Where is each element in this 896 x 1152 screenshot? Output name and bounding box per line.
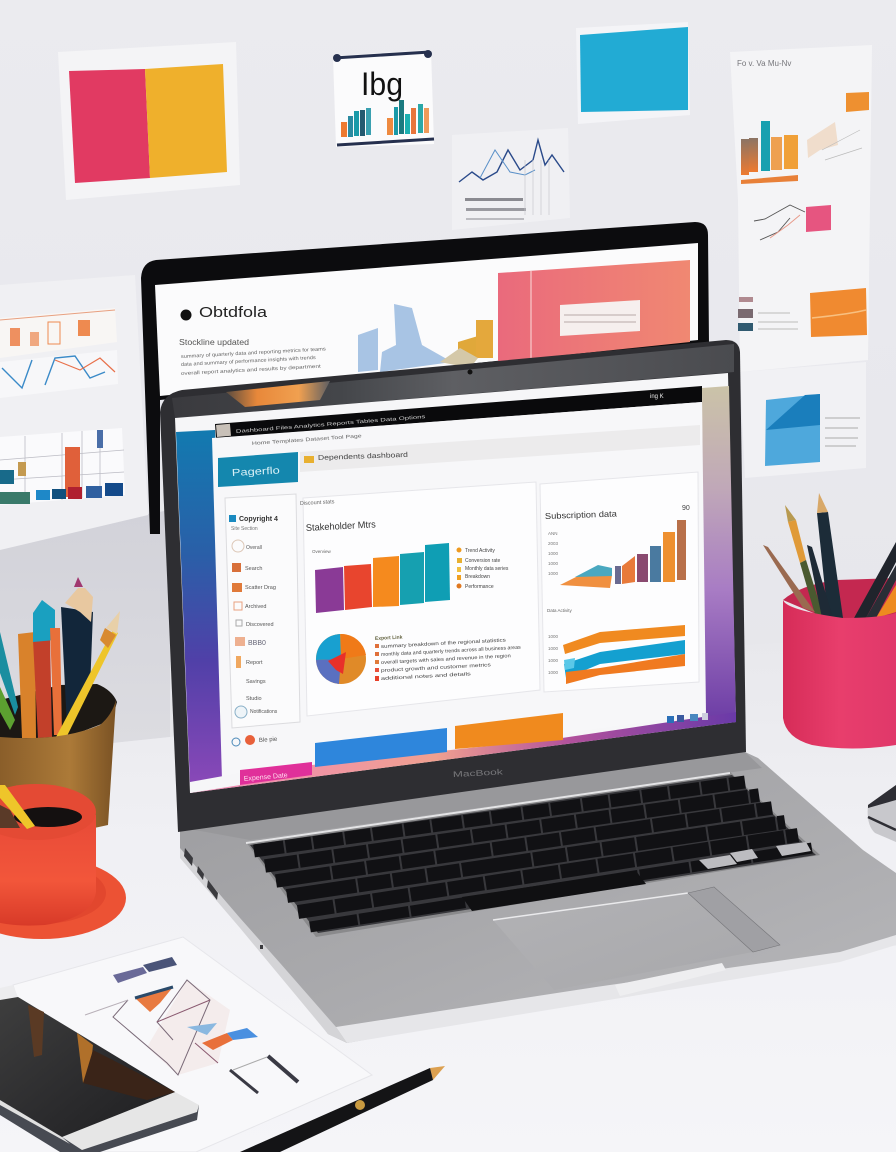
browser top bar text [216, 394, 664, 437]
sidebar [225, 494, 300, 728]
note card: small bar chart with title: Ibg [361, 66, 403, 102]
pink tab: Expense Date [244, 772, 288, 783]
sidebar: Copyright 4 [239, 516, 278, 523]
light keys [699, 842, 811, 869]
side ports [184, 848, 263, 949]
sidebar: Scatter Drag [245, 585, 276, 591]
saucer [0, 857, 126, 939]
sheet blue and orange mark [187, 1023, 258, 1050]
monitor subheading: Stockline updated [179, 338, 249, 347]
note card: small bar chart with title [333, 50, 434, 147]
area band chart: 1000 [548, 670, 559, 675]
left pencil cup [0, 577, 120, 830]
side axis labels: 1000 [548, 551, 559, 556]
browser top bar text: Dashboard Files Analytics Reports Tables Data Options [236, 414, 426, 435]
pie notes [375, 635, 521, 682]
report bar chart [741, 121, 798, 184]
poster: left wall charts [0, 275, 148, 550]
trackpad bright edge [493, 893, 688, 920]
poster: right wall report [730, 45, 872, 478]
sidebar: Search [245, 566, 262, 572]
toolbar [252, 427, 691, 447]
pie notes: monthly data and quarterly trends across all business areas [381, 645, 521, 658]
tab strip [300, 425, 700, 472]
side axis labels: 1000 [548, 561, 559, 566]
left silver side band [180, 848, 347, 1043]
pen [240, 1066, 445, 1152]
sidebar: Archived [245, 604, 266, 610]
poster: blue swatch [576, 22, 690, 124]
line sketch chart [0, 350, 118, 398]
area band chart: 1000 [548, 646, 559, 651]
pencils in brown cup [0, 577, 120, 738]
front lip [336, 935, 896, 1043]
area band chart: 1000 [548, 634, 559, 639]
main analytics card [300, 482, 540, 716]
photo thumbnails [738, 297, 798, 331]
screen wallpaper [175, 373, 736, 793]
area band chart: 1000 [548, 658, 559, 663]
side axis labels: 2003 [548, 541, 559, 546]
bar chart legend: Trend Activity [465, 548, 495, 554]
back monitor [141, 222, 709, 534]
browser top bar text: ing K [650, 394, 664, 400]
smartphone [0, 985, 199, 1152]
sidebar: Discovered [246, 622, 274, 628]
desk surface [0, 636, 896, 1152]
wall background [0, 0, 896, 760]
laptop brand: MacBook [453, 767, 505, 779]
monitor pink panel [498, 260, 690, 362]
phone screen [0, 997, 175, 1137]
phone top bezel [0, 985, 18, 1000]
sketch area [807, 122, 838, 158]
side analytics card [540, 472, 699, 692]
bar chart legend: Performance [465, 584, 494, 590]
card heading: Stakeholder Mtrs [306, 519, 376, 534]
mug body [0, 815, 96, 926]
coffee [14, 807, 82, 827]
pencils in cup [763, 493, 896, 618]
sidebar: BBB0 [248, 640, 266, 647]
browser window [212, 402, 706, 780]
bar chart legend: Monthly data series [465, 566, 509, 572]
pie notes: summary breakdown of the regional statistics [381, 637, 507, 650]
sidebar: Studio [246, 696, 262, 702]
orange block [810, 288, 867, 337]
hinge strip [184, 752, 762, 840]
saucer inner [0, 862, 106, 924]
report heading: Fo v. Va Mu-Nv [737, 59, 791, 68]
side analytics card: 90 [682, 505, 690, 512]
monitor heading [180, 304, 268, 321]
bar chart [312, 543, 450, 613]
sidebar: Savings [246, 679, 266, 685]
sheet tags [113, 957, 177, 983]
laptop lid [160, 340, 746, 832]
side bar chart [560, 520, 686, 588]
blue banner [315, 728, 447, 767]
monitor paragraph: summary of quarterly data and reporting metrics for teams [181, 346, 326, 360]
cup interior [783, 578, 896, 620]
pie notes: additional notes and details [381, 671, 472, 682]
monitor chart shapes [358, 304, 493, 372]
wallpaper left [176, 430, 232, 785]
tab strip: Dependents dashboard [318, 452, 408, 462]
sheet sketch [85, 980, 230, 1075]
orange sketch chart [0, 308, 117, 358]
device at right edge [868, 785, 896, 842]
spacebar [462, 871, 646, 911]
poster: red and yellow swatch [58, 42, 240, 200]
main analytics card: Discount stats [300, 499, 335, 507]
bar chart legend [456, 548, 509, 590]
side analytics card: Subscription data [545, 508, 617, 521]
card: line chart [452, 128, 570, 230]
toolbar: Home Templates Dataset Tool Page [252, 433, 362, 447]
bottom-left task row [190, 735, 278, 793]
yellow pencil in mug [0, 785, 35, 829]
phone white bezel [62, 1092, 199, 1150]
orange reflection [226, 381, 330, 407]
taskbar icons [667, 713, 708, 723]
pink tab [240, 762, 312, 785]
sidebar: Site Section [231, 526, 258, 532]
laptop base [180, 752, 896, 1043]
bar chart legend: Breakdown [465, 574, 490, 580]
pie notes: Export Link [375, 635, 403, 642]
screen reflection [28, 1005, 175, 1100]
side axis labels: 1000 [548, 571, 559, 576]
sidebar: Notifications [250, 709, 278, 715]
colored grid chart [0, 428, 125, 505]
blue diagram [765, 394, 860, 466]
shaded wall behind left cup [0, 510, 170, 745]
sidebar: Report [246, 660, 263, 666]
teal logo box: Pagerflo [232, 465, 281, 479]
bar chart: Overview [312, 549, 332, 554]
right pencil cup [763, 493, 896, 748]
line chart with pink square [754, 205, 831, 240]
side axis labels [548, 531, 559, 576]
keyboard [246, 772, 820, 937]
cup interior [0, 684, 117, 740]
camera [468, 370, 472, 374]
monitor screen [155, 243, 698, 396]
phone left bezel edge [0, 1100, 70, 1144]
area band chart [547, 608, 685, 684]
monitor paragraph: overall report analytics and results by department [181, 364, 322, 377]
trackpad side seam [688, 887, 780, 952]
bar chart legend: Conversion rate [465, 558, 501, 564]
orange banner [455, 713, 563, 749]
browser top bar [215, 386, 702, 438]
teal logo box [218, 452, 298, 487]
sidebar: Overall [246, 545, 262, 551]
red mug with saucer [0, 784, 126, 939]
monitor heading: Obtdfola [199, 304, 268, 321]
lower wallpaper band [190, 712, 736, 793]
bottom-left task row: Ble pie [259, 737, 278, 744]
trackpad [493, 893, 753, 990]
area band chart: Data Activity [547, 608, 573, 613]
side axis labels: ANN [548, 531, 558, 536]
monitor paragraph [181, 346, 326, 377]
sheet dark marks [230, 1056, 298, 1093]
upper bezel [172, 344, 734, 418]
monitor paragraph: data and summary of performance insights with trends [181, 355, 316, 368]
pie chart [316, 634, 366, 684]
phone dark edge [0, 1100, 199, 1152]
orange tag [846, 92, 869, 112]
pie notes: product growth and customer metrics [381, 662, 492, 674]
laptop latch notch [615, 963, 726, 996]
mug rim [0, 784, 96, 840]
wallpaper right [702, 386, 736, 726]
printed sheet on desk [13, 937, 372, 1152]
pie notes: overall targets with sales and revenue in the region [381, 653, 511, 666]
